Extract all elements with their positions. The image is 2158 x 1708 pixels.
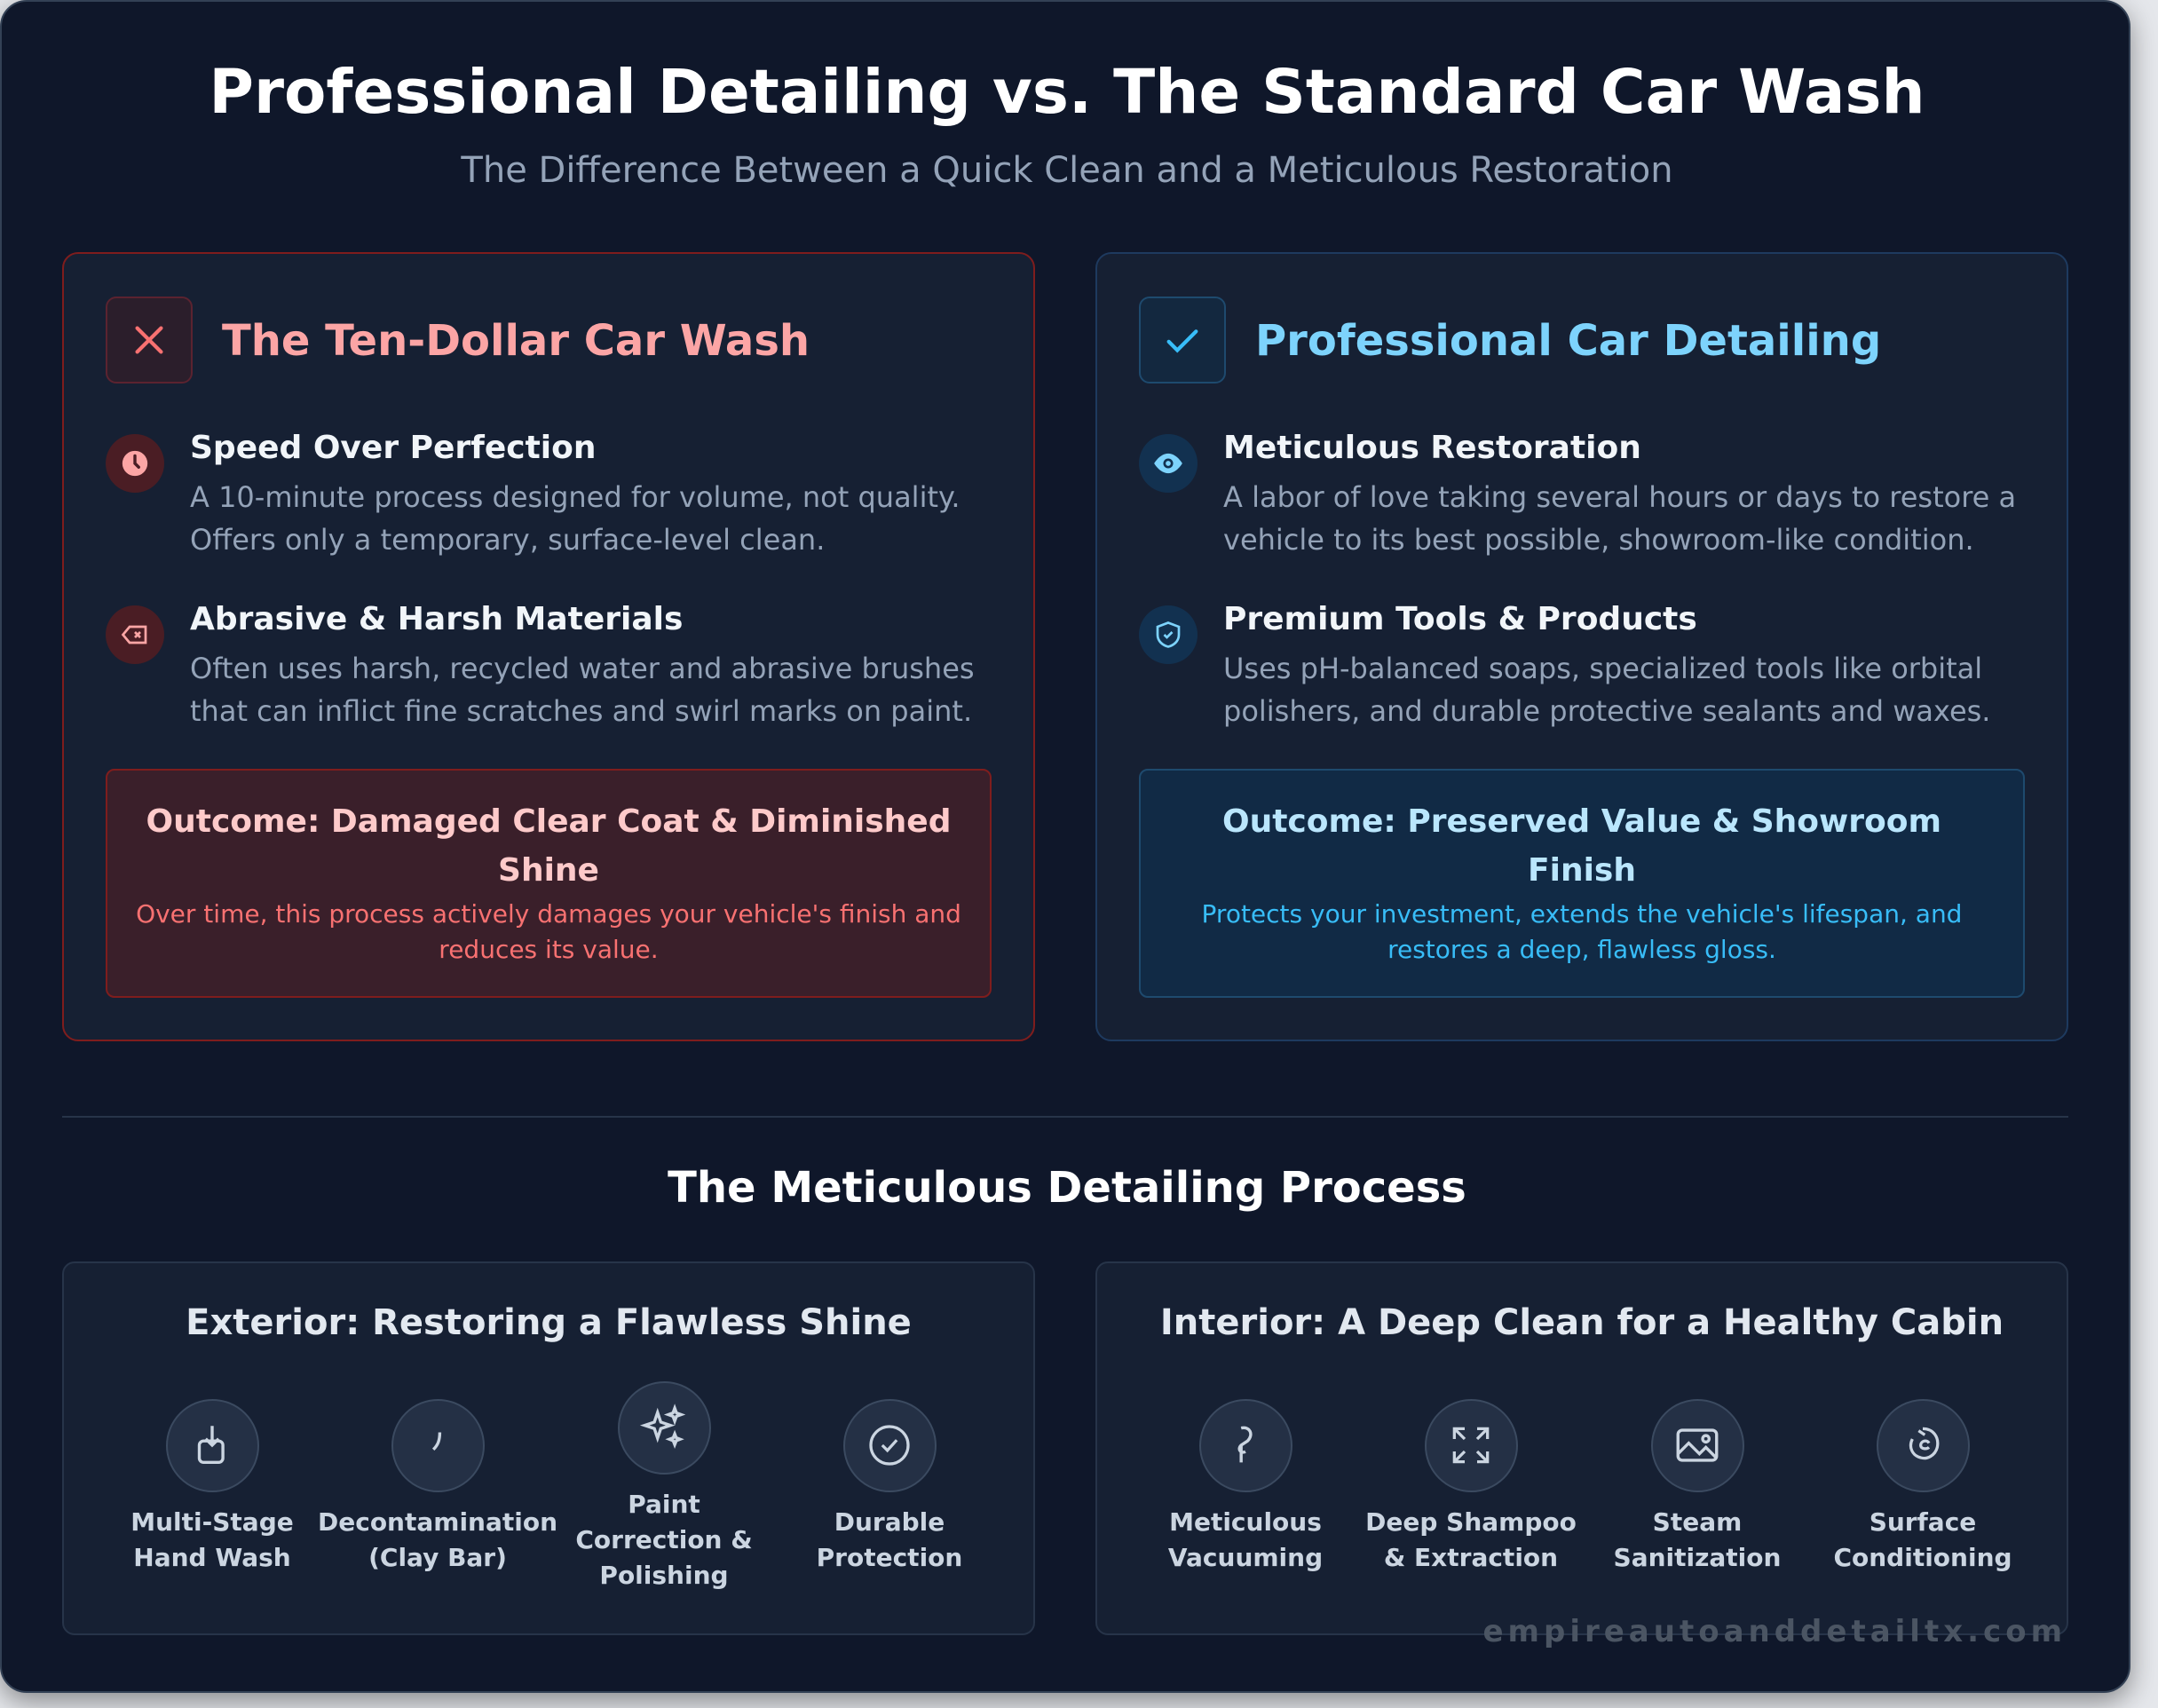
callout: positive outcome: [1139, 769, 2025, 998]
panel: professional detailing: [1095, 252, 2068, 1041]
step: clay bar: Decontamination: [318, 1507, 557, 1536]
heading: interior: Interior: A Deep Clean for a Healthy Cabin: [1160, 1302, 2004, 1343]
step: vacuuming: Vacuuming: [1168, 1543, 1323, 1571]
panel: exterior: [62, 1261, 1035, 1635]
callout: negative outcome: Over time, this process actively damages your vehicle's finish and reduces its value.: [136, 899, 961, 964]
item: abrasive: Abrasive & Harsh Materials: [190, 601, 683, 637]
icon: eye: [1139, 434, 1198, 493]
text: restoration desc: A labor of love taking several hours or days to restore a vehicle to its best possible, showroom-like condition.: [1223, 480, 2016, 557]
watermark: empireautoanddetailtx.com: [1482, 1614, 2067, 1649]
step: steam: Steam: [1653, 1507, 1742, 1536]
step: protection: Protection: [817, 1543, 962, 1571]
step: steam: Sanitization: [1614, 1543, 1781, 1571]
step: hand wash: [130, 1399, 294, 1571]
step: steam: [1614, 1399, 1781, 1571]
heading: car wash: The Ten-Dollar Car Wash: [222, 316, 810, 366]
callout: positive outcome: Outcome: Preserved Value & Showroom Finish: [1222, 803, 1941, 889]
subtitle: The Difference Between a Quick Clean and a Meticulous Restoration: [461, 150, 1673, 191]
heading: detailing: Professional Car Detailing: [1255, 316, 1881, 366]
item: premium: Premium Tools & Products: [1223, 601, 1697, 637]
step: conditioning: [1833, 1399, 2012, 1571]
item: restoration: Meticulous Restoration: [1223, 430, 1641, 466]
step: protection: [817, 1399, 962, 1571]
panel: interior: [1095, 1261, 2068, 1635]
heading: exterior: Exterior: Restoring a Flawless Shine: [186, 1302, 912, 1343]
step: conditioning: Surface: [1869, 1507, 1976, 1536]
step: clay bar: (Clay Bar): [368, 1543, 507, 1571]
text: premium desc: Uses pH-balanced soaps, specialized tools like orbital polishers, and durable protective sealants and waxes.: [1223, 652, 1990, 728]
callout: positive outcome: Protects your investment, extends the vehicle's lifespan, and restores a deep, flawless gloss.: [1202, 899, 1962, 964]
item: speed: Speed Over Perfection: [190, 430, 597, 466]
step: conditioning: Conditioning: [1833, 1543, 2012, 1571]
icon: eraser: [106, 605, 164, 664]
step: shampoo: Deep Shampoo: [1365, 1507, 1577, 1536]
icon: shield: [1139, 605, 1198, 664]
step: paint correction: Paint: [628, 1490, 700, 1518]
text: abrasive desc: Often uses harsh, recycled water and abrasive brushes that can inflict fine scratches and swirl marks on paint.: [190, 652, 975, 728]
icon: x: [106, 297, 193, 384]
step: paint correction: Polishing: [599, 1561, 729, 1589]
step: paint correction: Correction &: [575, 1525, 753, 1554]
step: clay bar: [318, 1399, 557, 1571]
step: hand wash: Hand Wash: [133, 1543, 291, 1571]
step: shampoo: [1365, 1399, 1577, 1571]
step: hand wash: Multi-Stage: [130, 1507, 294, 1536]
title: Professional Detailing vs. The Standard Car Wash: [209, 57, 1925, 128]
icon: clock: [106, 434, 164, 493]
step: vacuuming: [1168, 1399, 1323, 1571]
text: speed desc: A 10-minute process designed for volume, not quality. Offers only a temporary, surface-level clean.: [190, 480, 960, 557]
callout: negative outcome: [106, 769, 992, 998]
heading: process: The Meticulous Detailing Process: [668, 1163, 1466, 1213]
panel: ten-dollar car wash: [62, 252, 1035, 1041]
step: vacuuming: Meticulous: [1169, 1507, 1322, 1536]
step: paint correction: [575, 1381, 753, 1589]
step: protection: Durable: [834, 1507, 945, 1536]
callout: negative outcome: Outcome: Damaged Clear Coat & Diminished Shine: [146, 803, 952, 889]
step: shampoo: & Extraction: [1384, 1543, 1558, 1571]
icon: check: [1139, 297, 1226, 384]
